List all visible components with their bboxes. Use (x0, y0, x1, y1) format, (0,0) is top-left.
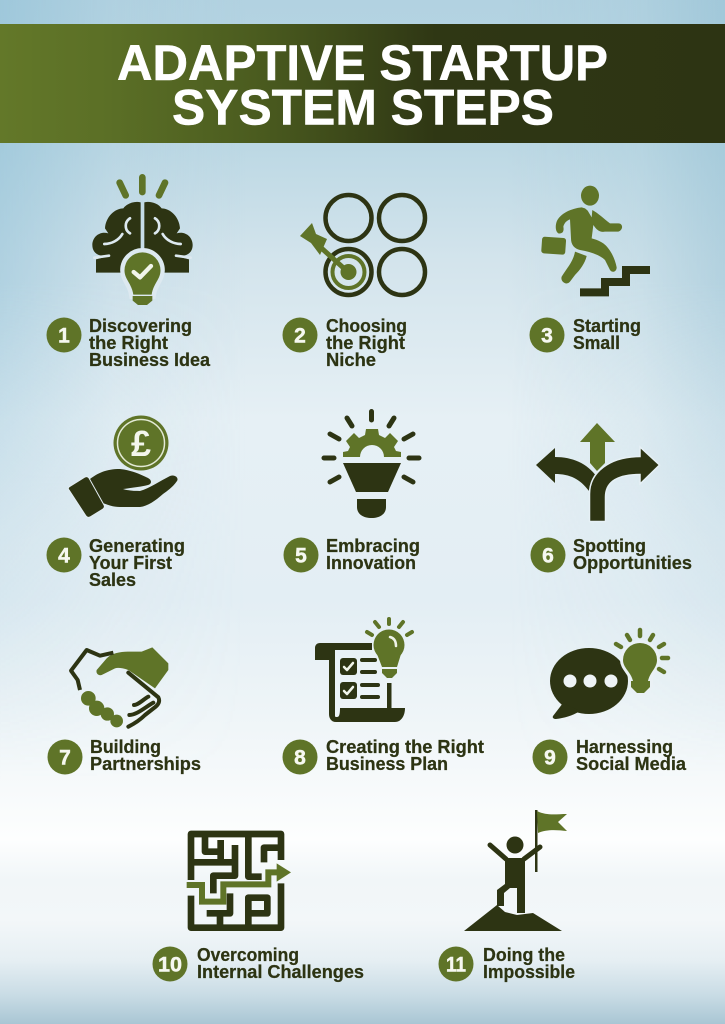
label: overcoming internal challenges: Overcoming (197, 945, 299, 965)
icon: speech bubble with lightbulb (550, 630, 668, 719)
icon: hand holding pound coin (68, 416, 178, 517)
number badge 10 (152, 946, 188, 982)
label: doing the impossible (483, 945, 575, 982)
label: choosing the right niche: Choosing (326, 316, 407, 336)
number badge 11: 11 (446, 954, 466, 976)
icon: circles and target dart (300, 195, 425, 295)
icon: hand holding pound coin: £ (131, 423, 151, 464)
label: building partnerships: Building (90, 737, 161, 757)
step 3: starting small (530, 186, 650, 353)
label: generating your first sales (89, 536, 185, 590)
icon: three-way arrows (536, 423, 660, 522)
step 9: harnessing social media (532, 630, 687, 774)
title: ADAPTIVE STARTUP (117, 35, 608, 91)
label: generating your first sales: Sales (89, 570, 136, 590)
number badge 6: 6 (542, 544, 554, 568)
number badge 2 (282, 318, 318, 352)
label: generating your first sales: Your First (89, 553, 172, 573)
number badge 1: 1 (58, 324, 70, 348)
number badge 5: 5 (295, 544, 307, 568)
icon: checklist scroll with lightbulb (315, 619, 412, 722)
icon: handshake (71, 647, 168, 727)
number badge 4: 4 (58, 544, 70, 568)
label: choosing the right niche: Niche (326, 350, 376, 370)
label: spotting opportunities: Opportunities (573, 553, 692, 573)
label: discovering the right business idea: Business Idea (89, 350, 211, 370)
step 2: choosing the right niche (282, 195, 425, 370)
step 8: creating the right business plan (282, 619, 484, 774)
number badge 10: 10 (158, 954, 182, 976)
header banner (0, 24, 725, 143)
label: overcoming internal challenges (197, 945, 364, 982)
number badge 5 (284, 538, 318, 572)
label: spotting opportunities (573, 536, 692, 573)
label: harnessing social media: Harnessing (576, 737, 673, 757)
label: choosing the right niche (326, 316, 407, 370)
number badge 4 (46, 538, 82, 572)
step 1: discovering the right business idea (46, 177, 211, 370)
label: discovering the right business idea (89, 316, 211, 370)
step 6: spotting opportunities (530, 423, 692, 573)
label: creating the right business plan: Business Plan (326, 754, 448, 774)
number badge 7: 7 (59, 746, 71, 770)
label: starting small: Starting (573, 316, 641, 336)
number badge 9 (532, 740, 568, 774)
number badge 8: 8 (294, 746, 306, 770)
step 7: building partnerships (48, 647, 201, 774)
label: harnessing social media (576, 737, 687, 774)
number badge 3: 3 (541, 324, 553, 348)
label: discovering the right business idea: the Right (89, 333, 168, 353)
step 10: overcoming internal challenges (152, 834, 364, 982)
label: embracing innovation: Embracing (326, 536, 420, 556)
number badge 11 (438, 946, 474, 982)
number badge 1 (46, 318, 82, 352)
number badge 8 (282, 740, 318, 774)
title (117, 35, 608, 136)
label: choosing the right niche: the Right (326, 333, 405, 353)
label: building partnerships (90, 737, 201, 774)
number badge 7 (48, 740, 82, 774)
number badge 3 (530, 318, 564, 352)
step 11: doing the impossible (438, 810, 575, 982)
step 5: embracing innovation (284, 412, 420, 573)
number badge 2: 2 (294, 324, 306, 348)
label: harnessing social media: Social Media (576, 754, 687, 774)
label: starting small: Small (573, 333, 620, 353)
label: discovering the right business idea: Discovering (89, 316, 192, 336)
step 4: generating your first sales (46, 416, 185, 590)
label: embracing innovation: Innovation (326, 553, 416, 573)
icon: brain with lightbulb (92, 177, 193, 305)
label: spotting opportunities: Spotting (573, 536, 646, 556)
label: doing the impossible: Impossible (483, 962, 575, 982)
icon: person with flag on mountain (464, 810, 567, 931)
label: generating your first sales: Generating (89, 536, 185, 556)
label: overcoming internal challenges: Internal Challenges (197, 962, 364, 982)
label: doing the impossible: Doing the (483, 945, 565, 965)
icon: lightbulb with gear (324, 412, 419, 518)
number badge 9: 9 (544, 746, 556, 770)
icon: maze with arrow (187, 834, 291, 928)
label: embracing innovation (326, 536, 420, 573)
label: building partnerships: Partnerships (90, 754, 201, 774)
label: creating the right business plan (326, 737, 484, 774)
number badge 6 (530, 538, 566, 572)
title: SYSTEM STEPS (172, 80, 554, 136)
label: starting small (573, 316, 641, 353)
label: creating the right business plan: Creating the Right (326, 737, 484, 757)
icon: running businessman on stairs (541, 186, 650, 292)
